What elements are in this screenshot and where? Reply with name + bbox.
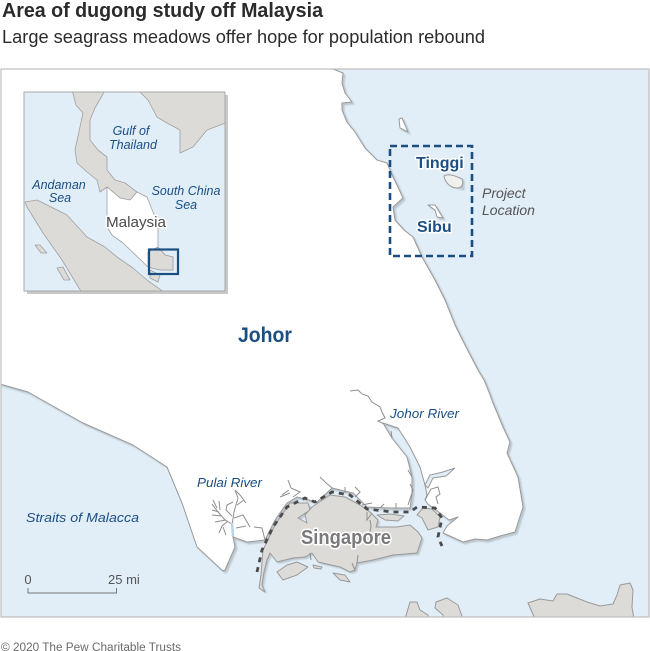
title: Area of dugong study off Malaysia [2, 0, 324, 22]
land shadow [2, 62, 525, 573]
label: Singapore: Singapore [301, 527, 391, 549]
inset label: Gulf of Thailand: Thailand [109, 138, 158, 152]
subtitle: Large seagrass meadows offer hope for population rebound [2, 27, 485, 47]
inset label: South China Sea: Sea [175, 198, 197, 212]
scale bar [24, 572, 140, 593]
label: Sibu: Sibu [417, 219, 452, 236]
inset label: Gulf of Thailand: Gulf of [113, 124, 151, 138]
inset label: Andaman Sea: Andaman [31, 178, 86, 192]
inset frame [24, 92, 225, 291]
inset label: South China Sea [152, 184, 220, 212]
label: Straits of Malacca: Straits of Malacca [26, 510, 139, 525]
Singapore [259, 495, 422, 592]
scale bar: 0 [24, 572, 32, 587]
label: Johor River: Johor River [389, 406, 460, 421]
inset location box [149, 250, 178, 274]
Singapore shadow [261, 497, 424, 594]
project location box [390, 146, 472, 256]
inset label: Andaman Sea [31, 178, 86, 205]
label: Project Location: Project [482, 185, 527, 201]
small islands [35, 245, 160, 282]
label: Project Location: Location [482, 202, 535, 218]
Thai peninsula [72, 90, 137, 200]
inset label: Malaysia: Malaysia [106, 214, 167, 231]
Malaysia [107, 187, 173, 270]
inset label: Gulf of Thailand [109, 124, 158, 152]
inset label: Andaman Sea: Sea [49, 191, 71, 205]
border dashed line [257, 492, 442, 572]
small creeks on the north shore of the strait [254, 431, 440, 540]
islands: Tinggi, Sibu and north island [399, 118, 463, 218]
label: Tinggi: Tinggi [416, 155, 464, 172]
Pulau Tekong [417, 508, 440, 530]
Sumatra [25, 200, 165, 293]
inset shadow [27, 95, 228, 294]
Pulau Ubin [377, 514, 404, 521]
mainland [0, 60, 523, 571]
bottom islands [405, 583, 634, 619]
river inlet east of the Johor estuary [425, 468, 455, 488]
inset label: South China Sea: South China [152, 184, 220, 198]
inset locator map [24, 90, 228, 294]
Pulai River [212, 490, 250, 537]
scale bar: 25 mi [108, 572, 140, 587]
inset water [24, 92, 225, 291]
label: Project Location [482, 185, 535, 218]
Johor River [350, 390, 385, 424]
Indochina [138, 90, 228, 153]
label: Pulai River: Pulai River [197, 475, 263, 490]
Jurong island and southern islets [277, 562, 350, 582]
Johor highlight [148, 247, 173, 270]
label: Johor: Johor [238, 324, 292, 347]
Singapore inlets [310, 512, 372, 570]
